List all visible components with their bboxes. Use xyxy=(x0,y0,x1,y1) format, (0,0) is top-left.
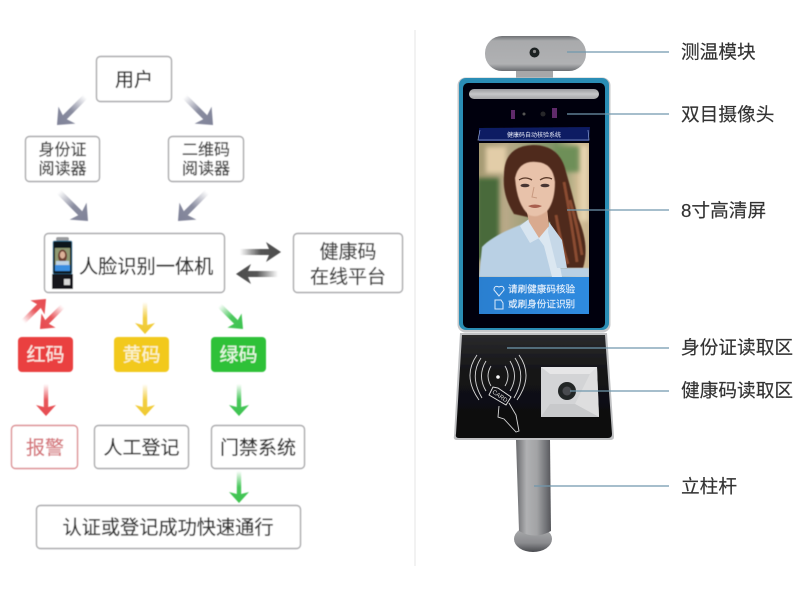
temperature module xyxy=(485,36,586,81)
box: QR code reader xyxy=(168,136,244,182)
arrow: green to access control xyxy=(229,384,249,416)
label: pole: 立柱杆 xyxy=(681,476,737,497)
box: manual registration: 人工登记 xyxy=(103,437,180,459)
badge: red code xyxy=(18,337,73,372)
arrow: access control to pass xyxy=(229,471,249,503)
hair xyxy=(504,145,586,268)
badge: yellow code xyxy=(114,337,169,372)
icon: mini terminal xyxy=(52,237,73,289)
label: temperature module: 测温模块 xyxy=(681,42,756,62)
arrow: user to ID reader xyxy=(49,88,94,133)
screen prompt panel xyxy=(479,277,589,314)
product image: terminal xyxy=(454,36,614,552)
icon: NFC card reader: CARD xyxy=(491,389,509,405)
screen housing xyxy=(458,78,610,332)
box: health code online platform xyxy=(294,234,402,292)
icon: document xyxy=(495,300,503,309)
box: face recognition terminal xyxy=(44,234,224,292)
screen prompt panel: 或刷身份证识别 xyxy=(508,298,575,310)
arrow: yellow down xyxy=(135,302,155,334)
icon: heart xyxy=(494,286,504,296)
screen title bar: 健康码自动核验系统 xyxy=(507,131,561,139)
icon: NFC card reader xyxy=(470,355,526,432)
arrow: yellow to manual registration xyxy=(135,384,155,416)
box: user xyxy=(96,56,172,102)
pillar xyxy=(514,440,552,552)
screen title bar xyxy=(478,127,590,141)
badge: yellow code: 黄码 xyxy=(122,344,161,366)
badge: red code: 红码 xyxy=(26,344,65,366)
box: ID card reader xyxy=(26,136,100,182)
box: access control system xyxy=(212,426,304,468)
box: pass quickly: 认证或登记成功快速通行 xyxy=(62,517,274,539)
leader lines xyxy=(507,52,669,486)
box: QR code reader: 阅读器 xyxy=(182,160,230,178)
box: alarm: 报警 xyxy=(26,437,64,459)
badge: green code: 绿码 xyxy=(219,344,258,366)
label: 8-inch screen: 8寸高清屏 xyxy=(681,200,766,221)
box: health code online platform: 在线平台 xyxy=(310,266,386,288)
arrow: terminal to health code platform xyxy=(240,242,281,262)
shirt xyxy=(479,219,589,277)
flowchart panel xyxy=(12,56,402,548)
face xyxy=(515,162,555,216)
box: user: 用户 xyxy=(115,69,153,91)
neck xyxy=(527,210,549,238)
arrow: ID reader to terminal xyxy=(51,184,96,229)
box: access control system: 门禁系统 xyxy=(220,437,296,459)
arrow: health code platform to terminal xyxy=(236,264,278,284)
arrow: red to alarm xyxy=(36,384,56,416)
box: manual registration xyxy=(94,426,188,468)
screen photo xyxy=(477,143,589,277)
box: ID card reader: 阅读器 xyxy=(38,160,87,178)
label: ID card reading area: 身份证读取区 xyxy=(681,337,793,358)
labels xyxy=(681,42,793,497)
arrow: QR reader to terminal xyxy=(170,184,215,229)
label: health code reading area: 健康码读取区 xyxy=(681,380,793,401)
box: QR code reader: 二维码 xyxy=(182,141,230,159)
box: health code online platform: 健康码 xyxy=(319,241,377,263)
QR scanner window xyxy=(541,367,599,417)
arrow: user to QR reader xyxy=(176,88,221,133)
box: face recognition terminal: 人脸识别一体机 xyxy=(79,256,213,278)
arrow: red down xyxy=(33,299,70,336)
badge: green code xyxy=(211,337,266,372)
label: binocular camera: 双目摄像头 xyxy=(681,104,774,125)
box: alarm xyxy=(12,426,78,468)
box: ID card reader: 身份证 xyxy=(38,141,87,159)
screen prompt panel: 请刷健康码核验 xyxy=(508,284,576,296)
arrow: green diagonal xyxy=(213,299,250,336)
reader panel xyxy=(454,333,614,440)
arrow: red up xyxy=(16,292,53,329)
box: pass quickly xyxy=(36,506,300,548)
